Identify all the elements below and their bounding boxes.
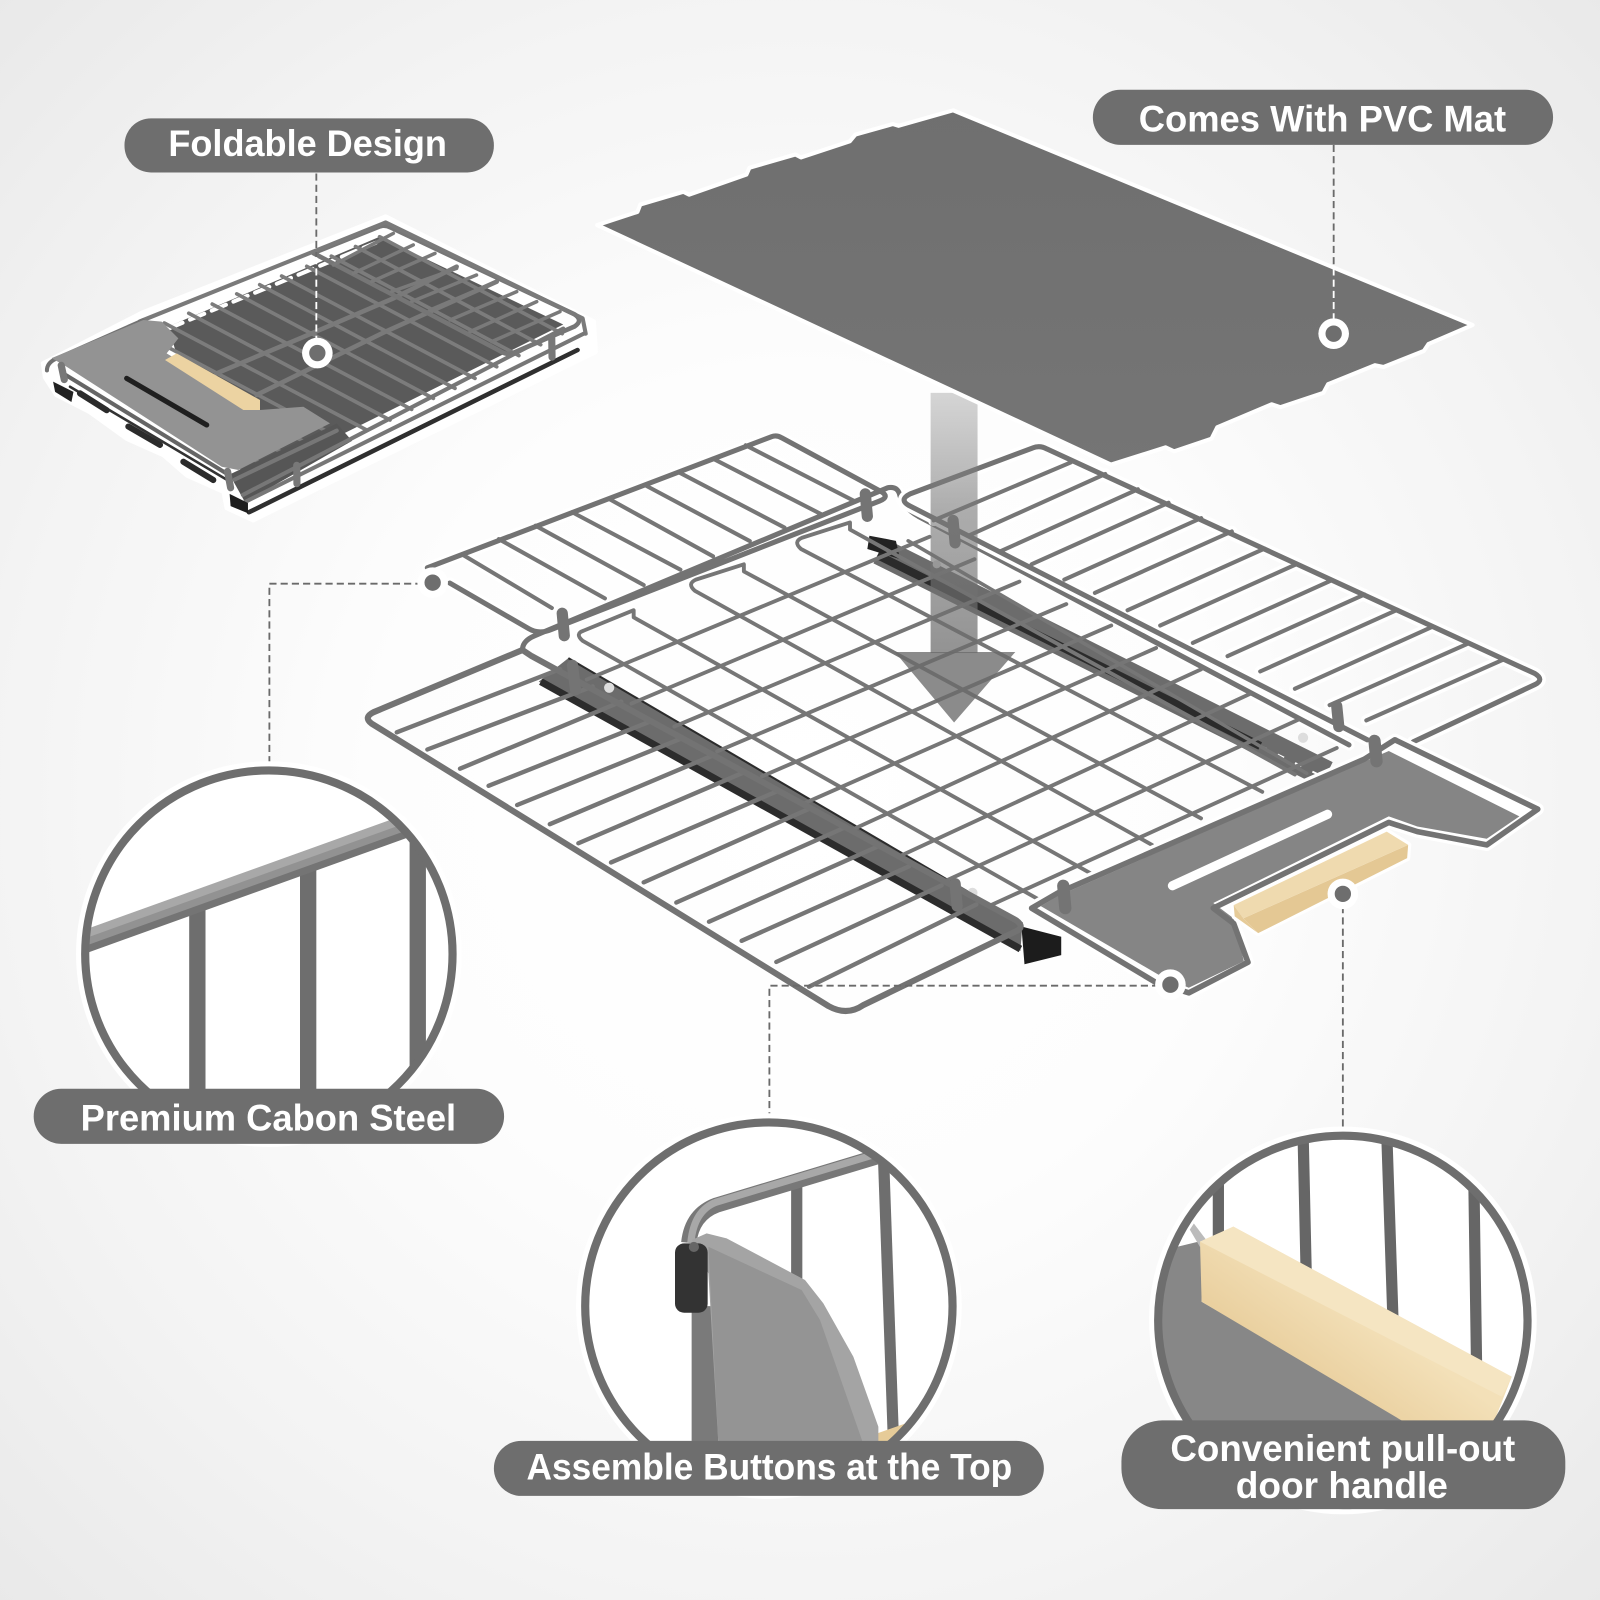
label: Foldable Design [124,118,494,172]
slide rail: right [867,536,1327,779]
detail circle: assemble buttons [576,1113,962,1499]
wooden handle [1234,832,1408,933]
label: Convenient pull-out door handle: door handle [1236,1465,1448,1506]
marker dot: buttons [1155,969,1186,1000]
leader: foldable design [315,173,317,343]
leader: carbon steel [269,584,422,765]
panel: folded basket [43,216,596,520]
leader: PVC mat [1333,145,1335,324]
marker dot: PVC mat [1318,318,1349,349]
label: Convenient pull-out door handle: Convenient pull-out [1170,1428,1515,1469]
leader: assemble buttons [769,986,1159,1117]
label: Foldable Design: Foldable Design [168,123,447,164]
marker dot: steel [417,567,448,598]
label: Comes With PVC Mat [1093,90,1553,145]
detail circle: door handle [1143,1127,1537,1514]
label: Comes With PVC Mat: Comes With PVC Mat [1139,99,1506,140]
panel: PVC mat [597,110,1473,465]
slide rail: left [539,658,1061,964]
panel: upper-right wires [904,447,1540,773]
panel: lower-left wire section [368,494,1339,1011]
marker dot: foldable [302,338,333,368]
panel: central wire grid [579,522,1337,906]
label: Premium Cabon Steel [34,1089,504,1144]
label: Convenient pull-out door handle [1121,1420,1565,1509]
leader: door handle [1342,906,1344,1128]
label: Premium Cabon Steel: Premium Cabon Steel [81,1098,456,1139]
marker dot: handle [1328,879,1358,909]
arrow: downward placement [895,393,1015,722]
detail circle: carbon steel [76,761,457,1089]
label: Assemble Buttons at the Top: Assemble Buttons at the Top [527,1447,1012,1488]
panel: handle tray [1032,740,1538,993]
label: Assemble Buttons at the Top [494,1441,1044,1496]
panel: upper-right wire halo [904,447,1540,742]
panel: upper-left wire section [427,436,1349,745]
